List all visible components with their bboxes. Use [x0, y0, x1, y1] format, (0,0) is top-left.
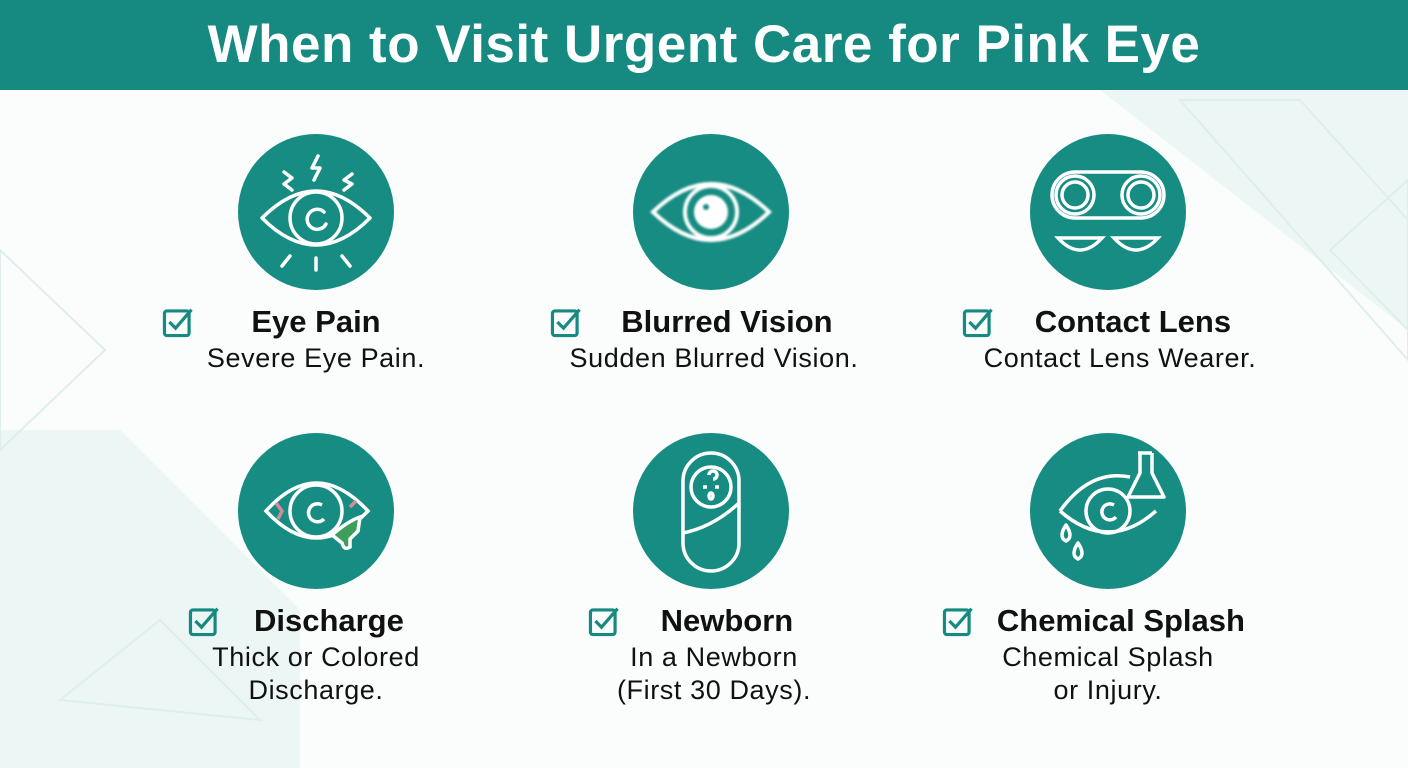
label: newborn — [588, 603, 811, 705]
label: discharge: Discharge — [254, 603, 404, 638]
label: contact lens: Contact Lens — [1035, 304, 1231, 339]
label: discharge — [188, 603, 420, 705]
title: When to Visit Urgent Care for Pink Eye — [208, 15, 1200, 74]
label: eye pain — [162, 304, 425, 373]
label: newborn: (First 30 Days). — [617, 675, 811, 705]
label: chemical splash: Chemical Splash — [1002, 642, 1214, 672]
label: newborn: In a Newborn — [630, 642, 798, 672]
icon: discharge — [238, 433, 394, 589]
icon: chemical splash — [1030, 433, 1186, 589]
checkbox — [162, 308, 193, 338]
label: discharge: Discharge. — [248, 675, 384, 705]
label: chemical splash: Chemical Splash — [997, 603, 1245, 638]
label: blurred vision: Sudden Blurred Vision. — [570, 343, 858, 373]
icon: blurred eye — [633, 134, 789, 290]
title — [0, 0, 1408, 90]
label: blurred vision: Blurred Vision — [621, 304, 833, 339]
icon: newborn — [633, 433, 789, 589]
label: blurred vision — [550, 304, 858, 373]
label: chemical splash: or Injury. — [1053, 675, 1163, 705]
label: contact lens — [962, 304, 1256, 373]
label: contact lens: Contact Lens Wearer. — [984, 343, 1256, 373]
icon: eye pain — [238, 134, 394, 290]
label: newborn: Newborn — [661, 603, 793, 638]
label: eye pain: Severe Eye Pain. — [207, 343, 425, 373]
label: eye pain: Eye Pain — [251, 304, 381, 339]
icon: contact lens — [1030, 134, 1186, 290]
label: chemical splash — [942, 603, 1245, 705]
label: discharge: Thick or Colored — [212, 642, 420, 672]
